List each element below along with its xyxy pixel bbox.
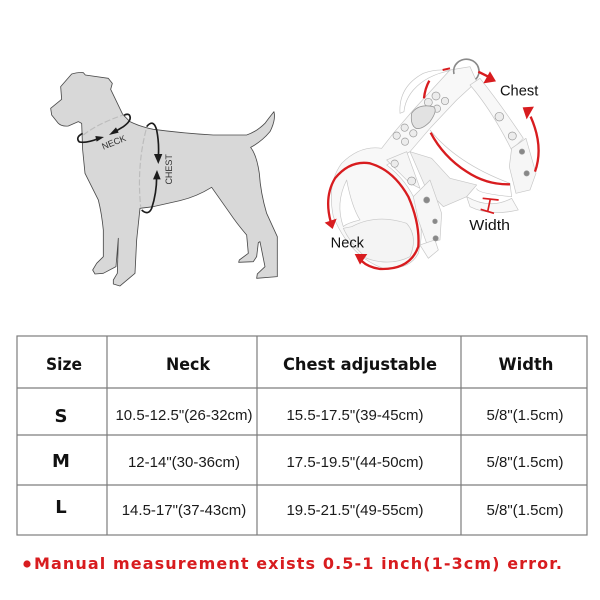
header row: Chest adjustable xyxy=(283,355,437,375)
row L: 19.5-21.5"(49-55cm) xyxy=(286,502,424,519)
row L: L xyxy=(55,497,67,518)
row M: 12-14"(30-36cm) xyxy=(128,454,240,471)
harness studs xyxy=(391,92,529,241)
header row: Size xyxy=(46,355,82,375)
row M xyxy=(52,451,564,472)
dog silhouette xyxy=(51,72,277,286)
size table xyxy=(17,336,587,535)
header row: Neck xyxy=(166,355,211,375)
row L: 5/8"(1.5cm) xyxy=(486,502,564,519)
row S: 5/8"(1.5cm) xyxy=(486,407,564,424)
neck red arrow xyxy=(325,163,419,269)
row S: 10.5-12.5"(26-32cm) xyxy=(115,407,253,424)
table grid xyxy=(17,336,587,535)
header row: Width xyxy=(498,355,554,375)
dog diagram xyxy=(51,72,277,286)
neck arrows xyxy=(78,114,130,142)
note bullet xyxy=(23,560,31,568)
label: Neck: Neck xyxy=(331,234,364,251)
harness shield emblem xyxy=(411,106,435,129)
measurement note xyxy=(23,554,562,573)
row M: 17.5-19.5"(44-50cm) xyxy=(286,454,424,471)
dashed measurement lines xyxy=(83,115,146,207)
harness sketch xyxy=(331,67,536,268)
chest red arrow xyxy=(424,68,539,184)
harness diagram xyxy=(325,59,539,269)
row M: M xyxy=(52,451,70,472)
harness ring xyxy=(454,59,479,79)
label: NECK: NECK xyxy=(100,133,127,152)
note text: Manual measurement exists 0.5-1 inch(1-3cm) error. xyxy=(34,554,562,573)
row S: 15.5-17.5"(39-45cm) xyxy=(286,407,424,424)
row L: 14.5-17"(37-43cm) xyxy=(122,502,246,519)
row L xyxy=(55,497,564,519)
row S xyxy=(55,406,564,427)
row S: S xyxy=(55,406,67,427)
label: Width: Width xyxy=(469,217,510,234)
chest arrows xyxy=(142,123,162,213)
label: Chest: Chest xyxy=(500,82,539,99)
header row xyxy=(46,355,554,375)
row M: 5/8"(1.5cm) xyxy=(486,454,564,471)
label: CHEST: CHEST xyxy=(164,154,174,185)
width marker xyxy=(481,198,499,213)
